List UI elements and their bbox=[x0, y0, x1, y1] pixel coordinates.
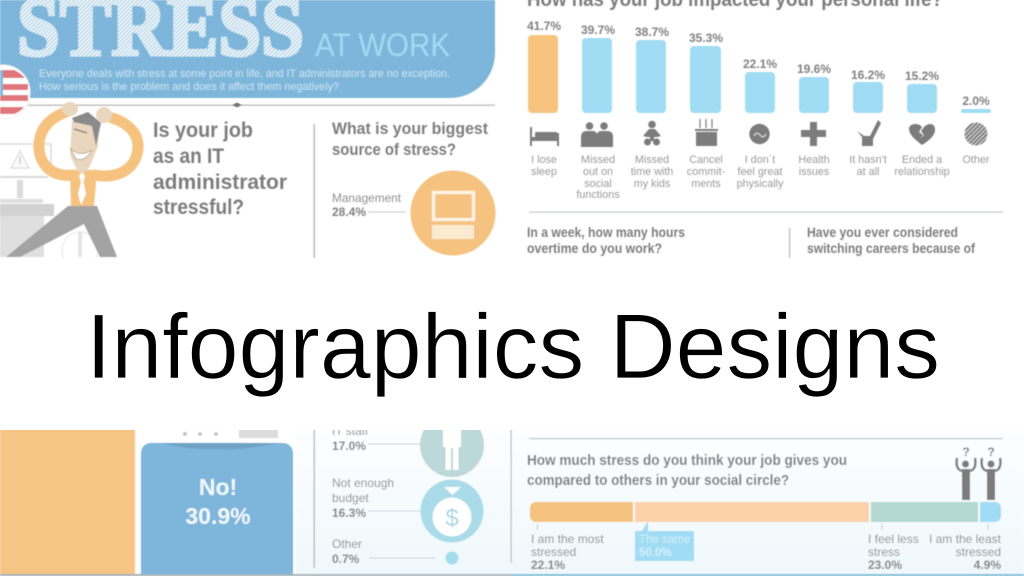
divider with marker bbox=[28, 102, 495, 108]
column divider bbox=[314, 124, 315, 258]
bar labels bbox=[531, 154, 990, 201]
figure right: ? bbox=[987, 445, 995, 459]
label: most stressed 22.1%: I am the most bbox=[531, 532, 604, 546]
stat: IT staff 17.0%: IT staff bbox=[332, 424, 369, 438]
icon: checkbox tick bbox=[857, 120, 881, 146]
label: missed time with my kids: time with bbox=[631, 166, 673, 178]
label: most stressed 22.1% bbox=[531, 532, 604, 572]
illustration: stressed man at desk bbox=[0, 102, 138, 268]
label: health issues: Health bbox=[798, 154, 830, 166]
intro text: How serious is the problem and does it affect them negatively? bbox=[39, 81, 339, 93]
bar: I lose sleep 41.7%: 41.7% bbox=[527, 19, 561, 33]
label: don't feel great: feel great bbox=[737, 166, 783, 178]
heading: is your job stressful: Is your job bbox=[153, 119, 253, 142]
stat: other 0.7%: Other bbox=[332, 537, 362, 551]
icon: two people bbox=[581, 122, 613, 147]
stat: other 0.7%: 0.7% bbox=[332, 552, 360, 566]
panel: pale bottom background bbox=[296, 426, 1024, 576]
bar: ended relationship 15.2% bbox=[905, 69, 939, 113]
stacked bar: stress compared bbox=[530, 502, 1001, 530]
bar: I lose sleep 41.7% bbox=[527, 19, 561, 113]
label: cancel commitments: Cancel bbox=[689, 154, 723, 166]
label: feel less 23.0%: I feel less bbox=[868, 532, 919, 546]
bar: hasn't at all 16.2% bbox=[851, 68, 885, 113]
label: don't feel great: physically bbox=[737, 178, 784, 190]
bottom edge strip bbox=[0, 574, 1024, 576]
callout: the same 50.0% bbox=[635, 521, 694, 561]
decorative dots and tab bbox=[183, 426, 278, 438]
label: other: Other bbox=[962, 154, 990, 166]
label: feel less 23.0%: 23.0% bbox=[868, 558, 902, 572]
segment: least stressed bbox=[980, 502, 1001, 522]
bar: missed social functions 39.7% bbox=[581, 23, 615, 113]
heading: stress compared to others: compared to others in your social circle? bbox=[527, 473, 789, 489]
icon: money bag bbox=[420, 480, 484, 542]
label: missed out on social functions: Missed bbox=[581, 154, 615, 166]
label: missed time with my kids: Missed bbox=[635, 154, 669, 166]
icon: computer bbox=[410, 170, 496, 256]
heading: overtime hours bbox=[527, 225, 685, 256]
label: cancel commitments: commit- bbox=[687, 166, 726, 178]
heading: is your job stressful bbox=[153, 119, 287, 219]
bar: missed kids 38.7% bbox=[635, 25, 669, 113]
heading: biggest source of stress bbox=[332, 119, 488, 159]
label: least stressed 4.9%: stressed bbox=[956, 545, 1001, 559]
icon: birthday cake bbox=[695, 119, 718, 146]
bar: health issues 19.6%: 19.6% bbox=[797, 62, 831, 76]
bar: hasn't at all 16.2%: 16.2% bbox=[851, 68, 885, 82]
label: ended a relationship: Ended a bbox=[902, 154, 942, 166]
column divider bbox=[314, 426, 315, 568]
header panel: stress at work bbox=[0, 0, 495, 98]
heading: is your job stressful: administrator bbox=[153, 171, 287, 194]
torso and tie bbox=[70, 170, 97, 206]
stat: other 0.7% bbox=[332, 537, 458, 566]
bar: other 2.0% bbox=[961, 94, 991, 113]
stat: IT staff 17.0% bbox=[332, 413, 484, 477]
label: missed time with my kids: my kids bbox=[634, 178, 671, 190]
bar: cancel commitments 35.3% bbox=[689, 31, 723, 113]
heading: is your job stressful: as an IT bbox=[153, 145, 224, 168]
segment: most stressed bbox=[530, 502, 633, 522]
heading: overtime hours: In a week, how many hours bbox=[527, 225, 685, 240]
label: don't feel great: I don´t bbox=[745, 154, 775, 166]
head bbox=[70, 116, 99, 172]
label: health issues: issues bbox=[799, 166, 830, 178]
bar: missed social functions 39.7%: 39.7% bbox=[581, 23, 615, 37]
stat: management 28.4%: Management bbox=[332, 191, 402, 205]
bar: missed kids 38.7%: 38.7% bbox=[635, 25, 669, 39]
white title band bbox=[0, 258, 1024, 430]
icon: US flag badge bbox=[0, 65, 30, 119]
icon: person bbox=[420, 413, 484, 477]
label: missed out on social functions: out on bbox=[583, 166, 613, 178]
panel: orange yes block bbox=[0, 426, 135, 574]
divider bbox=[529, 438, 1003, 439]
label: missed out on social functions: social bbox=[584, 178, 612, 190]
bar: not great physically 22.1% bbox=[743, 57, 777, 113]
label: most stressed 22.1%: stressed bbox=[531, 545, 576, 559]
stat: IT staff 17.0%: 17.0% bbox=[332, 439, 366, 453]
main title: Infographics Designs bbox=[86, 296, 940, 398]
panel: No 30.9%: 30.9% bbox=[185, 503, 251, 529]
icon: money bag: $ bbox=[445, 505, 459, 532]
bar: cancel commitments 35.3%: 35.3% bbox=[689, 31, 723, 45]
label: least stressed 4.9% bbox=[929, 532, 1002, 572]
label: it hasn't at all: at all bbox=[857, 166, 879, 178]
stat: management 28.4% bbox=[332, 170, 496, 256]
column divider bbox=[510, 426, 512, 563]
callout: the same 50.0%: 50.0% bbox=[639, 547, 672, 559]
label: least stressed 4.9%: I am the least bbox=[929, 532, 1002, 546]
heading: stress compared to others: How much stress do you think your job gives you bbox=[527, 453, 847, 469]
stat: not enough budget 16.3%: budget bbox=[332, 491, 369, 505]
callout: the same 50.0%: The same bbox=[639, 534, 690, 546]
label: feel less 23.0% bbox=[868, 532, 919, 572]
heading: biggest source of stress: What is your biggest bbox=[332, 119, 488, 138]
label: cancel commitments: ments bbox=[691, 178, 721, 190]
label: least stressed 4.9%: 4.9% bbox=[974, 558, 1001, 572]
icon: two stressed figures bbox=[957, 445, 1000, 500]
icon: unwell face bbox=[749, 124, 770, 144]
heading: stress compared to others bbox=[527, 453, 847, 489]
stat: not enough budget 16.3%: Not enough bbox=[332, 476, 394, 490]
segment: feel less bbox=[871, 502, 978, 522]
label: most stressed 22.1%: 22.1% bbox=[531, 558, 565, 572]
label: missed out on social functions: functions bbox=[576, 189, 620, 201]
arms bbox=[39, 112, 74, 175]
bar chart: job impact on personal life bbox=[527, 19, 991, 113]
panel: No 30.9% bbox=[141, 443, 293, 574]
heading: is your job stressful: stressful? bbox=[153, 196, 244, 219]
intro text: Everyone deals with stress at some point in life, and IT administrators are no exception. bbox=[39, 68, 450, 80]
desk and monitor bbox=[0, 144, 98, 268]
icon: hatched circle bbox=[964, 122, 988, 146]
label: I lose sleep: sleep bbox=[531, 166, 557, 178]
bar: other 2.0%: 2.0% bbox=[962, 94, 990, 108]
icon: baby bbox=[643, 121, 661, 146]
label: it hasn't at all: It hasn't bbox=[849, 154, 887, 166]
icon: broken heart bbox=[909, 124, 935, 145]
icon: health cross bbox=[801, 122, 826, 146]
heading: switching careers: Have you ever considered bbox=[807, 225, 958, 240]
label: ended a relationship: relationship bbox=[894, 166, 950, 178]
hands bbox=[62, 102, 78, 116]
panel: No 30.9%: No! bbox=[199, 474, 237, 500]
bar: ended relationship 15.2%: 15.2% bbox=[905, 69, 939, 83]
stat: management 28.4%: 28.4% bbox=[332, 205, 366, 219]
label: feel less 23.0%: stress bbox=[868, 545, 900, 559]
divider bbox=[529, 212, 1003, 213]
figure left: ? bbox=[962, 445, 970, 459]
bar: health issues 19.6% bbox=[797, 62, 831, 113]
column divider bbox=[789, 228, 790, 258]
title: AT WORK: AT WORK bbox=[315, 27, 450, 63]
bar: not great physically 22.1%: 22.1% bbox=[743, 57, 777, 71]
heading: switching careers: switching careers because of bbox=[807, 241, 975, 256]
stat: not enough budget 16.3% bbox=[332, 476, 484, 542]
segment: the same bbox=[635, 502, 869, 522]
intro text bbox=[39, 68, 450, 93]
label: I lose sleep: I lose bbox=[531, 154, 557, 166]
header background bbox=[0, 0, 495, 98]
heading: overtime hours: overtime do you work? bbox=[527, 241, 662, 256]
legs bbox=[6, 206, 117, 257]
stat: not enough budget 16.3%: 16.3% bbox=[332, 506, 366, 520]
heading: switching careers bbox=[807, 225, 975, 256]
heading: biggest source of stress: source of stress? bbox=[332, 140, 456, 159]
icon: bed bbox=[530, 127, 559, 146]
